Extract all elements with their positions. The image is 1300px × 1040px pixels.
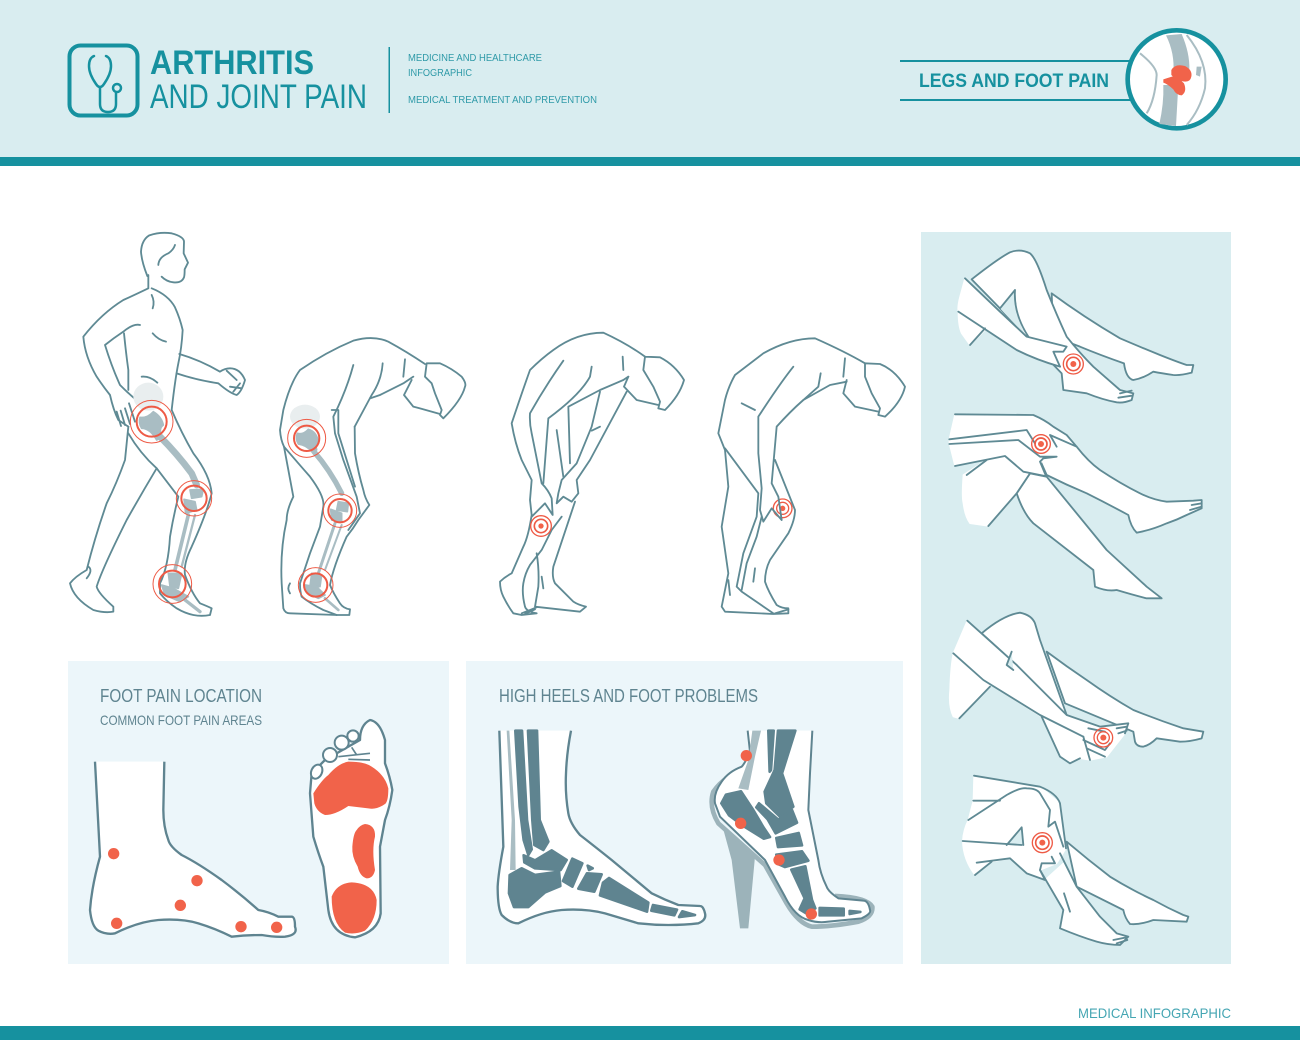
icon: knee joint badge bbox=[1128, 30, 1226, 128]
title: AND JOINT PAIN bbox=[150, 78, 367, 116]
panel: high heels and foot problems bbox=[466, 661, 903, 964]
figure: bent man holding legs, hip knee ankle pain bbox=[280, 338, 465, 615]
pain target: knee bbox=[773, 499, 792, 518]
section label: legs and foot pain: LEGS AND FOOT PAIN bbox=[919, 71, 1109, 92]
heading: high heels: HIGH HEELS AND FOOT PROBLEMS bbox=[499, 686, 758, 706]
pain target: knee bbox=[1032, 435, 1050, 453]
heading: foot pain location: FOOT PAIN LOCATION bbox=[100, 686, 262, 706]
foot side view with pain dots bbox=[90, 762, 296, 937]
subtitle text: INFOGRAPHIC bbox=[408, 67, 472, 79]
pain target: toes bbox=[1094, 728, 1113, 747]
figure: bent man holding shin bbox=[500, 333, 684, 615]
foot sole with pain areas bbox=[309, 720, 392, 937]
figure: walking man with pain points bbox=[70, 233, 245, 616]
seated legs: shin pain bbox=[949, 414, 1202, 598]
pain target: ankle bbox=[1063, 353, 1084, 375]
heading: foot pain location: COMMON FOOT PAIN AREAS bbox=[100, 712, 262, 728]
panel: seated leg pain bbox=[921, 232, 1231, 964]
heading: foot pain location bbox=[100, 686, 262, 728]
title bbox=[150, 44, 367, 116]
shoe bbox=[712, 770, 872, 928]
outline: walking man bbox=[70, 233, 245, 616]
skeleton: hip, leg and foot bones bbox=[133, 383, 203, 612]
subtitle text: MEDICINE AND HEALTHCARE bbox=[408, 52, 542, 64]
seated legs: ankle pain bbox=[958, 251, 1193, 403]
subtitle text: MEDICAL TREATMENT AND PREVENTION bbox=[408, 94, 597, 106]
normal foot skeleton bbox=[498, 731, 705, 925]
pain rings: walking man bbox=[130, 400, 212, 603]
seated legs: toe pain bbox=[950, 613, 1203, 763]
seated legs: knee side pain bbox=[963, 776, 1188, 945]
outline: bent man 1 bbox=[280, 338, 465, 615]
high heel foot skeleton with pain dots bbox=[712, 731, 872, 928]
pain rings: bent man 1 bbox=[288, 419, 357, 602]
pain target: thigh bbox=[1032, 833, 1052, 853]
title: ARTHRITIS bbox=[150, 44, 314, 82]
footer label: MEDICAL INFOGRAPHIC bbox=[1078, 1005, 1231, 1021]
skeleton: hip, leg and foot bones bbox=[290, 405, 348, 610]
figure: bent man holding knee bbox=[718, 338, 905, 614]
header banner bbox=[0, 0, 1300, 166]
footer band bbox=[0, 1026, 1300, 1040]
pain target: shin bbox=[531, 516, 551, 536]
subtitle text bbox=[408, 52, 597, 106]
panel: foot pain location bbox=[68, 661, 449, 964]
icon: stethoscope bbox=[70, 46, 138, 116]
